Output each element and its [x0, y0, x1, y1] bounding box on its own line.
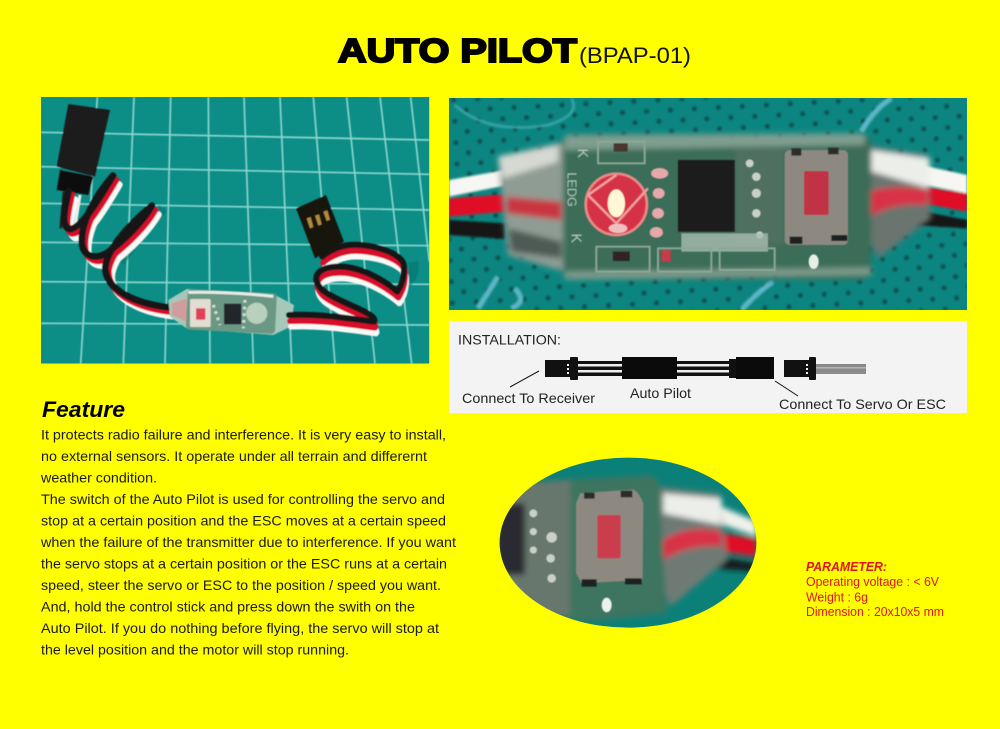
solder joints: [529, 509, 612, 612]
photo: close-up of module with LED: [449, 98, 967, 310]
feature description text: speed, steer the servo or ESC to the position / speed you want.: [41, 577, 441, 593]
feature description text: the level position and the motor will stop running.: [41, 642, 349, 658]
feature description text: no external sensors. It operate under all terrain and differernt: [41, 448, 427, 464]
title: (BPAP-01): [579, 43, 691, 68]
lead wires: [449, 165, 967, 240]
board silk text: K: [574, 148, 590, 158]
wiring diagram: [545, 357, 866, 380]
small components: [596, 142, 819, 272]
parameter block: Operating voltage : < 6V: [806, 575, 940, 589]
parameter block: Weight : 6g: [806, 590, 868, 604]
feature description text: when the failure of the transmitter due to interference. If you want: [40, 534, 456, 550]
board silk text: [566, 149, 588, 244]
feature description text: It protects radio failure and interference. It is very easy to install,: [41, 426, 446, 442]
tact switch: [785, 148, 848, 245]
parameter block: PARAMETER:: [806, 560, 887, 574]
feature description text: weather condition.: [40, 470, 157, 486]
label: auto pilot: Auto Pilot: [630, 385, 691, 401]
feature description text: Auto Pilot. If you do nothing before flying, the servo will stop at: [41, 620, 439, 636]
switch body: [576, 489, 643, 583]
module body: [168, 289, 294, 335]
title: AUTO PILOT: [338, 32, 577, 69]
solder pads: [650, 168, 668, 238]
panel: installation diagram: [449, 321, 967, 413]
IC chip: [678, 160, 735, 232]
soft cable shadows: [120, 208, 414, 295]
label: connect to receiver: Connect To Receiver: [462, 390, 595, 406]
left servo connector: [57, 104, 110, 228]
heat shrink sleeve: [498, 142, 931, 272]
red LED pad: [586, 174, 648, 235]
parameter block: Dimension : 20x10x5 mm: [806, 605, 944, 619]
parameter block: [806, 560, 944, 619]
title: [338, 32, 691, 69]
feature description text: stop at a certain position and the ESC moves at a certain speed: [41, 512, 446, 528]
wires: [716, 504, 756, 575]
right servo connector: [296, 195, 344, 258]
feature description text: [40, 426, 456, 658]
feature description text: the servo stops at a certain position or the ESC runs at a certain: [41, 556, 447, 572]
feature description text: The switch of the Auto Pilot is used for controlling the servo and: [41, 491, 445, 507]
installation heading: INSTALLATION:: [458, 332, 561, 348]
arrow: receiver leader line: [510, 371, 539, 387]
board silk text: LEDG: [564, 172, 578, 207]
photo: auto pilot module with servo leads on cutting mat: [41, 97, 429, 364]
heat shrink: [660, 487, 727, 607]
feature heading: Feature: [42, 397, 125, 422]
red button: [597, 515, 621, 558]
board: [533, 472, 670, 624]
switch legs: [582, 491, 642, 587]
circuit board: [563, 134, 871, 279]
label: connect to servo or ESC: Connect To Servo Or ESC: [779, 396, 946, 412]
ic edge: [497, 503, 525, 575]
arrow: servo leader line: [775, 381, 798, 396]
board silk text: K: [567, 233, 583, 243]
photo: oval close-up of tact switch: [497, 455, 760, 632]
right cable loops: [289, 245, 406, 333]
left cable loops: [64, 176, 175, 316]
feature description text: And, hold the control stick and press down the swith on the: [41, 598, 415, 614]
